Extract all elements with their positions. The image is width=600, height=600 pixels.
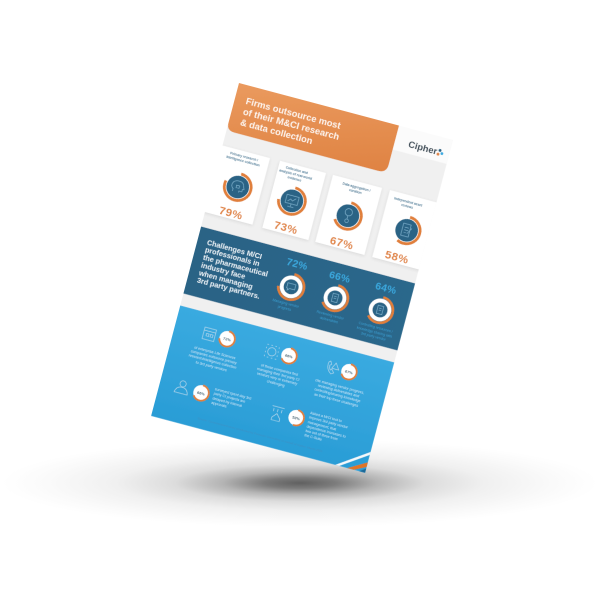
icon: monitor: [284, 194, 299, 208]
finding 66% vendors: of those companies find: [260, 363, 298, 377]
stat: vendor deliverables: deliverables: [319, 316, 339, 324]
stat: vendor deliverables: [316, 271, 350, 324]
card label: curation: [349, 188, 362, 195]
icon: phone: [326, 361, 340, 376]
percentage: 79%: [218, 205, 244, 223]
percentage: 58%: [384, 249, 410, 267]
finding 53%: two out of three from: [305, 429, 338, 441]
ring: [367, 296, 395, 324]
icon: deliverable sheet: [331, 293, 339, 303]
panel: challenges band: [183, 226, 415, 350]
card: data aggregation: [315, 175, 382, 256]
corner stripes: [335, 444, 371, 473]
band heading: when managing: [197, 268, 254, 291]
stat: controlling resources: 3rd party vendor: [360, 331, 387, 342]
badge: 72%: [223, 335, 232, 342]
finding 53%: dependence increases to: [306, 424, 346, 439]
donut 67%: [333, 202, 364, 231]
icon: knowledge sheet: [376, 305, 384, 315]
finding 66% approvals: approvals: [211, 401, 227, 409]
icon: grid: [202, 327, 217, 342]
card: primary research: [202, 145, 270, 226]
finding 66% vendors: vendors very or extremely: [256, 372, 298, 386]
donut 79%: [222, 172, 253, 202]
card label: Primary research /: [230, 151, 259, 162]
card: asset reviews: [372, 190, 440, 271]
badge: 67%: [345, 368, 354, 375]
finding 67%: [311, 356, 370, 408]
stat: vendor progress: progress: [277, 304, 292, 312]
logo panel: [392, 125, 453, 164]
finding 66% vendors: [254, 341, 307, 391]
badge: 66%: [197, 390, 206, 397]
icon: chat: [286, 283, 296, 292]
finding 72%: research/intelligence collection: [188, 353, 237, 370]
badge: 53%: [292, 414, 301, 421]
card label: evidence: [287, 175, 302, 183]
card label: Data aggregation /: [342, 181, 371, 193]
band heading: professionals in: [204, 245, 261, 269]
finding 53%: [267, 401, 350, 448]
card: real-world evidence: [262, 161, 326, 240]
icon: people and house: [269, 406, 285, 422]
band heading: Challenges M/CI: [206, 238, 263, 261]
stat: vendor deliverables: 66%: [328, 270, 351, 286]
percentage: 73%: [273, 219, 299, 237]
finding 72%: of enterprise Life Sciences: [194, 345, 236, 360]
finding 67%: controlling/sharing knowledge: [314, 387, 361, 404]
logo wordmark: Cipher: [407, 139, 439, 157]
finding 66% approvals: delayed by internal: [212, 396, 243, 408]
header banner: [226, 83, 399, 173]
ring: [276, 272, 306, 302]
stat: controlling resources: knowledge sharing with: [356, 325, 393, 339]
footnote: Source: Commissioned study conducted by Forrester Consulting on behalf of Cipher, March 2021: [197, 416, 323, 453]
stat: vendor deliverables: Reviewing vendor: [316, 310, 345, 321]
icon: network: [264, 344, 279, 359]
icon: logo dots: [436, 148, 444, 156]
card label: analysis of real-world: [279, 168, 312, 181]
tilted poster: [148, 82, 456, 474]
panel: blue findings: [151, 306, 394, 473]
stat: vendor progress: [272, 258, 307, 311]
finding 72%: [188, 326, 237, 372]
finding 53%: improve 3rd party vendor: [309, 415, 349, 430]
card label: Independent asset: [394, 196, 424, 208]
finding 66% vendors: challenging: [266, 379, 285, 388]
finding 66% approvals: [173, 377, 252, 414]
card label: reviews: [401, 203, 414, 210]
stat: vendor progress: 72%: [285, 257, 309, 273]
icon: head: [231, 180, 244, 193]
finding 53%: the C-Suite: [304, 433, 322, 442]
donut 58%: [395, 216, 422, 246]
finding 66% approvals: party CI projects are: [213, 392, 246, 404]
card label: Collection and: [285, 165, 308, 175]
finding 72%: companies outsource primary: [190, 349, 237, 365]
stat: controlling resources: [356, 282, 396, 340]
ring: [321, 284, 350, 312]
finding 53%: Asked a M/CI tool to: [310, 411, 342, 423]
finding 67%: cite managing vendor progress,: [315, 378, 365, 395]
stat: controlling resources: 64%: [374, 281, 398, 297]
stat: controlling resources: Controlling resources /: [358, 321, 393, 334]
finding 66% approvals: surveyed spent day 3rd: [214, 387, 252, 401]
finding 67%: as their top three challenges: [314, 392, 359, 408]
title: Firms outsource most: [245, 96, 342, 131]
finding 53%: management, that: [307, 420, 337, 431]
percentage: 67%: [328, 235, 355, 253]
band heading: industry face: [200, 261, 246, 281]
finding 67%: reviewing deliverables and: [317, 384, 360, 398]
ground shadow: [2, 439, 598, 527]
badge: 66%: [285, 352, 294, 359]
title: of their M&CI research: [242, 107, 341, 142]
title: & data collection: [239, 117, 314, 146]
icon: magnifier: [344, 208, 353, 223]
finding 72%: to 3rd party vendors: [195, 360, 228, 372]
icon: document: [401, 223, 413, 238]
band heading: the pharmaceutical: [202, 253, 269, 279]
card label: Intelligence collection: [226, 155, 260, 168]
icon: person: [174, 379, 190, 395]
donut 73%: [276, 186, 307, 216]
finding 66% vendors: managing their 3rd party CI: [257, 367, 300, 382]
stat: vendor progress: Managing vendor: [272, 298, 300, 309]
band heading: 3rd party partners.: [196, 276, 261, 301]
